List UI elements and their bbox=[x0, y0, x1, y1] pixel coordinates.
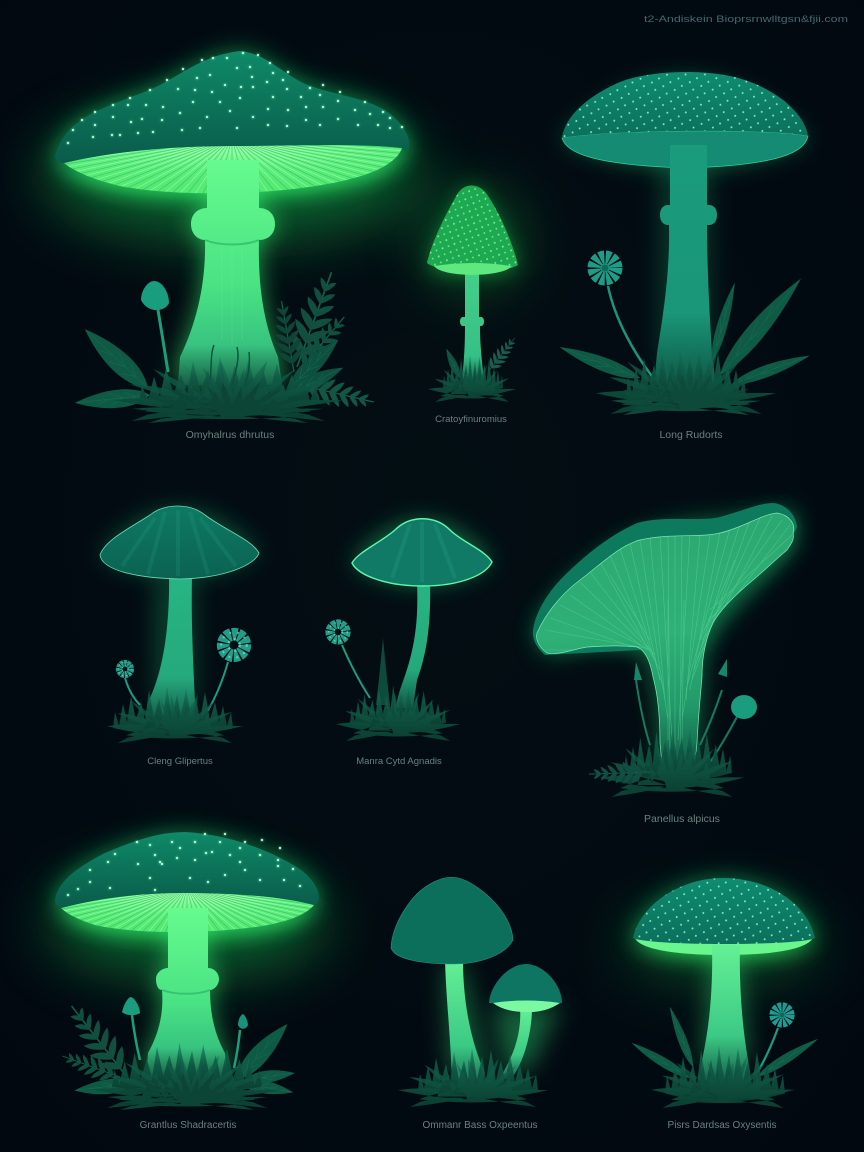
underside gills bbox=[64, 145, 402, 194]
plants bbox=[588, 659, 757, 797]
species label: Grantlus Shadracertis bbox=[140, 1120, 236, 1131]
attribution line top right: t2-Andiskein Bioprsrnwlltgsn&fjii.com bbox=[644, 14, 848, 25]
grass bbox=[336, 638, 460, 741]
species label: Panellus alpicus bbox=[644, 813, 720, 825]
small cap bbox=[489, 964, 562, 1012]
grass bbox=[398, 1048, 548, 1107]
stem bbox=[396, 580, 430, 708]
species label: Omyhalrus dhrutus bbox=[186, 429, 274, 441]
cap with spots bbox=[55, 51, 409, 163]
species label: Cleng Glipertus bbox=[147, 756, 213, 767]
small mushrooms bbox=[122, 997, 248, 1068]
flowers bbox=[118, 632, 247, 712]
flower bbox=[594, 257, 655, 380]
leaves and grass bbox=[557, 272, 812, 415]
mushroom 4: dark bell bbox=[100, 506, 259, 767]
cap with spots bbox=[562, 72, 808, 138]
species label: Cratoyfinuromius bbox=[435, 414, 507, 425]
species label: Manra Cytd Agnadis bbox=[356, 756, 442, 767]
species label: Pisrs Dardsas Oxysentis bbox=[668, 1120, 776, 1131]
grass bbox=[107, 686, 243, 743]
cap bbox=[427, 186, 518, 275]
mushroom 7: large spotted bright bbox=[42, 832, 326, 1131]
stem bbox=[460, 270, 485, 385]
species label: Long Rudorts bbox=[659, 429, 723, 441]
stem bbox=[698, 945, 752, 1085]
funnel gills bbox=[537, 513, 794, 765]
small mushroom bbox=[141, 281, 169, 372]
mushroom 6: funnel bbox=[533, 503, 797, 825]
cap bbox=[352, 519, 492, 586]
stem bbox=[146, 908, 228, 1078]
short stem bbox=[498, 1008, 532, 1080]
cap underside bbox=[562, 131, 808, 168]
tall stem bbox=[445, 960, 485, 1092]
underside bbox=[635, 935, 813, 955]
mushroom 2: small cone bbox=[427, 186, 521, 425]
mushroom 9: dense spotted dome bbox=[629, 878, 820, 1131]
cap with spots bbox=[55, 832, 319, 908]
back of cap bbox=[533, 503, 797, 655]
leaves and grass bbox=[629, 1005, 820, 1108]
underside gills bbox=[61, 893, 314, 932]
leaves and ferns bbox=[74, 266, 377, 423]
flower bbox=[757, 1007, 790, 1073]
stem bbox=[654, 145, 717, 385]
stem bbox=[178, 160, 282, 385]
species label: Ommanr Bass Oxpeentus bbox=[422, 1120, 538, 1131]
cap with spots bbox=[633, 878, 815, 944]
mushroom 1: large spotted bright bbox=[40, 51, 416, 441]
flower bbox=[329, 623, 370, 698]
stem bbox=[145, 575, 198, 722]
large cap bbox=[391, 877, 513, 964]
mushroom 5: bright rim bell bbox=[329, 519, 492, 767]
leaves and ferns bbox=[59, 996, 296, 1110]
cap bbox=[100, 506, 259, 579]
mushroom 8: twin caps bbox=[391, 877, 562, 1131]
ground plants bbox=[428, 333, 521, 402]
mushroom 3: teal dome bbox=[557, 72, 812, 441]
